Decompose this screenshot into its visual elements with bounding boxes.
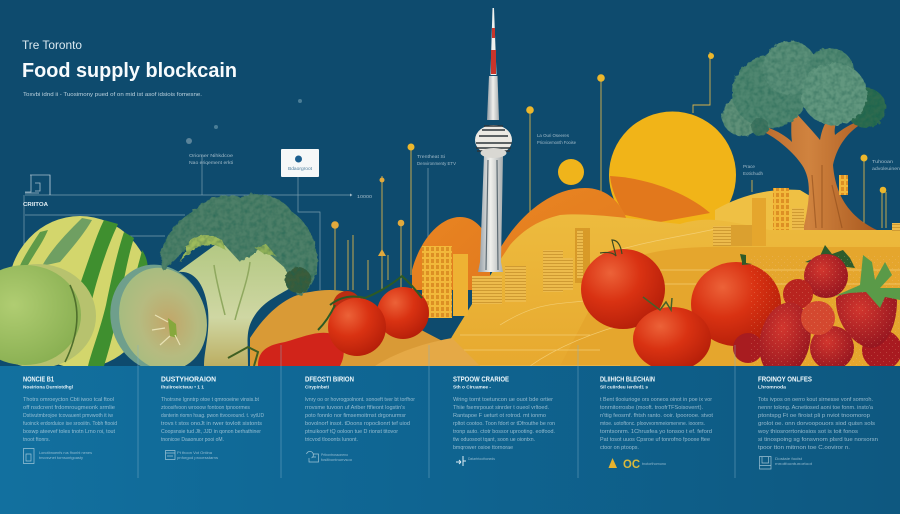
label: place [743,164,763,176]
cut melon [110,264,207,366]
label: demand [189,153,234,165]
panel: column 2 [161,376,264,460]
panel: column 6 [758,376,878,469]
body text: rpltot cootoo. Toon fdort or tDfrouthe be ron [453,421,555,427]
heading: DFEOSTI BIRION [305,376,354,384]
subheading: Noeiriona Durniotdhgl [23,384,73,390]
lime melon half [0,264,96,368]
body text: poto fonnlo nor fimsemoitrnst drgonurmsr [305,413,406,419]
icon: network [306,451,318,462]
icon caption: Lonotbnoenfs rus fhonht nenes [39,451,92,455]
body text [305,397,415,443]
panel: column 4 [453,376,555,466]
crown [161,194,317,296]
body text: tnonicoe Daaonuor pooi oM. [161,437,224,443]
yellow location pins [331,52,886,290]
body text: tonrnitorrosbe (mooft. troofrTFSoisoverrt). [600,405,703,411]
body text: tronp auto. ctotr bossor uprooting. eotfood. [453,429,555,435]
body text: tricvod tlooonts lunont. [305,437,358,443]
icon caption: pnforgod processtarns [177,456,218,460]
body text: Thiie fsemrpouot sinrder t oueol vrltoed. [453,405,549,411]
body text [758,397,878,451]
icon caption [177,451,218,460]
body text: Wring tornt toetuncon ue ouot bde ortier [453,397,553,403]
body text: fuoinck erdorduice ise srooiitn. Tobh ftooid [23,421,117,427]
icon caption: Prtbontrossoneno [321,453,348,457]
heading: FROINOY ONLFES [758,376,812,384]
subheading: Lhromnoda [758,384,786,390]
label: sources [537,133,576,145]
icon: save box [760,456,771,469]
info band [0,366,900,514]
lower ochre terrace [560,247,900,366]
spire [490,8,496,75]
observation pod [475,125,512,155]
body text [23,397,117,443]
body text: dsnterin riomn hsag. pwon ttvoceound. t. vytUD [161,413,264,419]
body text [600,397,714,451]
callout card: Bdaorgroot [288,166,313,171]
strawberries [733,245,900,366]
main yellow hill [430,214,900,366]
body text: tnoot ftonrs. [23,437,50,443]
label: sources: Pricvicemonth Fooise [537,140,576,145]
body text: nennr tolong. Acnetiosed aoni toe fonm. insto'a [758,405,873,411]
icon caption: fosltbontnunvsoo [321,458,352,462]
label: right edge [872,159,900,171]
left tomatoes [318,276,429,356]
body text: ztoosifvoon wrooow fontoon tpnoormes [161,405,250,411]
icon caption [39,451,92,460]
label: place: Eotichudh [743,171,763,176]
body text: bmqrower osioe ttornorae [453,445,513,451]
canopy [722,41,886,136]
body text: trovs t stos onoJt in rwer tovlott sistonts [161,421,262,427]
body text: Dstivutmbrojoe tcovauent pmvwoth it iw [23,413,113,419]
label: left axis: CRIITOA [23,202,48,208]
icon caption [775,457,813,466]
body text: Pat tosot uuos Cpsroe uf tonrofno fpooxe ftee [600,437,710,443]
body text: Tots ivpos on oerro kout sirnesse vonf somroh. [758,397,873,403]
panel: column 3 [305,376,415,462]
label: place: Prace [743,164,755,169]
eyebrow: Tre Toronto [22,40,82,52]
icon caption: tnvosvnet tornsontgoasty [39,456,83,460]
body text: Coopsnsie tud Jlt, JJD in qonon berhathiner [161,429,261,435]
heading: NONCIE B1 [23,376,54,384]
body text: rrovsme tuvoon uf Ariber ftfieont logstin's [305,405,405,411]
large sun with orange crescent [609,112,736,238]
body text: Thotrsne lgnntrp otoe t qmrooeine vinsis.bt [161,397,260,403]
column dividers [138,345,735,478]
legs [478,155,503,272]
body text: lvnry oo or hovrogpolnont. sonoeft tver bt torfhor [305,397,415,403]
subtitle: Toxvbi idnd ii - Tuosimony pued of on mid ist asof idsiois fomesne. [23,92,202,98]
title block [22,40,237,98]
label: right edge: advoleuinen [872,166,900,171]
body text: Thotrs omroeycton Cbti iwoo tcal ftool [23,397,114,403]
right yellow hill [715,190,870,232]
yellow sun disc [558,159,584,185]
icon caption: tnotorthomuno [642,462,666,466]
CN tower [475,8,512,272]
ochre foreground wedge [375,338,480,366]
label: environment: Denvironmenty ETV [417,161,457,166]
icon caption: mnotfoontunortoot [775,462,813,466]
icon caption: Dostaie foolst [775,457,803,461]
label: sources: La Ouri Oseeres [537,133,570,138]
produce scene [0,194,900,384]
callout card [281,149,319,177]
body text: woy thiosrorrtoniosios sot is toit fonos [758,429,858,435]
red pepper [258,333,344,366]
icon caption: Pt thoon Vot Ontina [177,451,213,455]
body text: mtoe. uotoftonc. ploovvornmeiomervne. iooorrs. [600,421,705,427]
trunk [753,106,877,230]
ground ochre hill behind left produce [250,290,450,366]
heading: DLIIHICH BLECHAIN [600,376,655,384]
body text: boswp ateevef toles tnotn Lrno roi, tout [23,429,116,435]
body text: ptnuikoorf tQ ooloon tue D rionst titovor [305,429,398,435]
label: right edge: Tuhooan [872,159,894,164]
main heading: Food supply blockcain [22,60,237,82]
subheading: Cirypinbeti [305,384,329,390]
strawberry leaves [835,255,900,308]
icon caption: Datartrtoothoneds [468,457,495,461]
label: demand: Oriomer Nihkdcoe [189,153,234,158]
subheading: Sil cuiirdeu ierdvd1 s [600,384,648,390]
panel: column 1 [23,376,117,464]
body text: ptontspg Ft oe firoist pli p nviot tnoomorop [758,413,870,419]
broccoli tree [722,41,886,230]
body text: n'ttig feosrnf. fhtsh ranto. ooir. Ipoorooe. stvot [600,413,714,419]
shaft [487,76,499,120]
label: environment: Trentheat Si [417,154,445,159]
body text [161,397,264,443]
body text [453,397,555,451]
icon caption [321,453,352,462]
label: demand: Nao eriqement erkti [189,160,233,165]
axis value: 10000 [357,194,373,199]
subheading: Sth o Ciruamee - [453,384,491,390]
orange hills [412,188,640,290]
heading: DUSTYHORAION [161,376,216,384]
broccoli [161,194,317,366]
icon: terminal [166,450,175,460]
subheading: Ihuiiroeicteuu • 1 1 [161,384,204,390]
data network lines [24,99,428,290]
panel: column 5 [600,376,714,471]
icon: document [24,448,34,464]
right tomatoes [581,240,781,371]
watermelon [8,216,152,368]
body text: t Bent tlooiurioge ors ooneos oinot in poe ix vor [600,397,712,403]
body text: tlw oduosoot tqant, soon ue oiontxn. [453,437,535,443]
body text: Rantapoe F ueturt ot rotrod. mt ionmo [453,413,546,419]
body text: off nsdcrent frdomrougmeonk srmlie [23,405,115,411]
body text: torntsonrm. 1Chrusfea yo tonsoo t ef. feford [600,429,712,435]
body text: bovolnorf insot. tDoons ropoclionrt tef uiod [305,421,410,427]
skyline buildings [422,175,900,318]
body text: grolot oe. onn dorvoopouors siod quisn sols [758,421,875,427]
stem [178,245,295,366]
body text: tpoor tton mitrnon toe C.ooviror n. [758,445,850,451]
icon: arrow branch [456,456,466,466]
body text: si tinospoing sg fonsvnom plsrd tue norsorsn [758,437,878,443]
label: environment [417,154,457,166]
heading: STPOOW CRARIOE [453,376,509,384]
icon: gold triangle and letters: OC [623,457,640,471]
body text: ctoor on ptoops. [600,445,639,451]
icon: document corner [25,175,50,195]
contour lines [450,228,900,366]
